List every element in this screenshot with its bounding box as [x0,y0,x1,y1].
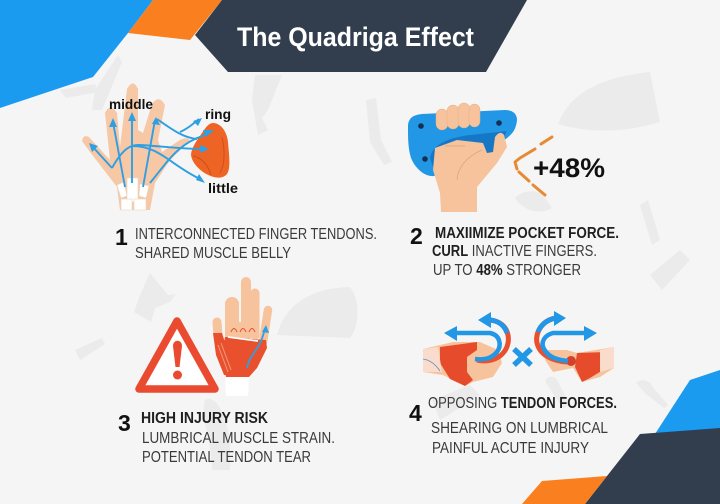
text block 3: POTENTIAL TENDON TEAR [142,449,311,466]
decorative corner: top-left orange [128,0,222,40]
title banner [195,0,527,72]
label: middle: middle [109,96,153,112]
icon: hand with lumbrical muscles [213,282,269,396]
text block 1: INTERCONNECTED FINGER TENDONS. [135,226,377,243]
icon: dashed chevron [515,137,552,195]
panel: opposing forces [409,311,617,457]
text block 4: OPPOSING TENDON FORCES. [428,395,617,412]
decorative corner: bottom-right dark [585,428,720,504]
title: The Quadriga Effect [237,22,474,52]
text block 1: SHARED MUSCLE BELLY [135,245,291,262]
text block 2: UP TO 48% STRONGER [433,262,581,279]
icon: blue X [514,349,531,365]
text block 3: HIGH INJURY RISK [141,410,269,427]
panel: pocket force [408,103,619,279]
icon: right arrows [537,311,597,362]
panel: injury risk [118,282,335,466]
text block 4: PAINFUL ACUTE INJURY [432,440,589,457]
text block 4 [428,395,617,457]
text block 3 [141,410,335,466]
number 1: 1 [115,224,128,250]
number 2: 2 [410,223,423,249]
icon: left arrows [444,312,508,361]
stat: +48%: +48% [533,153,605,183]
label: little: little [208,180,238,196]
number 3: 3 [118,410,131,436]
icon: left hand and arm [423,342,502,386]
text block 4: SHEARING ON LUMBRICAL [431,420,608,437]
number 4: 4 [409,400,422,426]
icon: hand gripping blue hold [408,103,517,212]
text block 3: LUMBRICAL MUSCLE STRAIN. [142,430,335,447]
text block 2: CURL INACTIVE FINGERS. [432,243,597,260]
decorative corner: bottom-right blue [655,370,720,434]
icon: right hand and arm [545,347,614,382]
label: ring: ring [205,106,231,122]
panel: interconnected tendons [82,84,377,262]
decorative corner: bottom-right orange [522,476,607,504]
text block 1 [135,226,377,262]
text block 2: MAXIIMIZE POCKET FORCE. [435,225,619,242]
icon: warning triangle [139,321,215,389]
text block 2 [432,225,619,279]
icon: hand with tendons and muscle [82,84,229,210]
decorative corner: top-left blue [0,0,153,108]
